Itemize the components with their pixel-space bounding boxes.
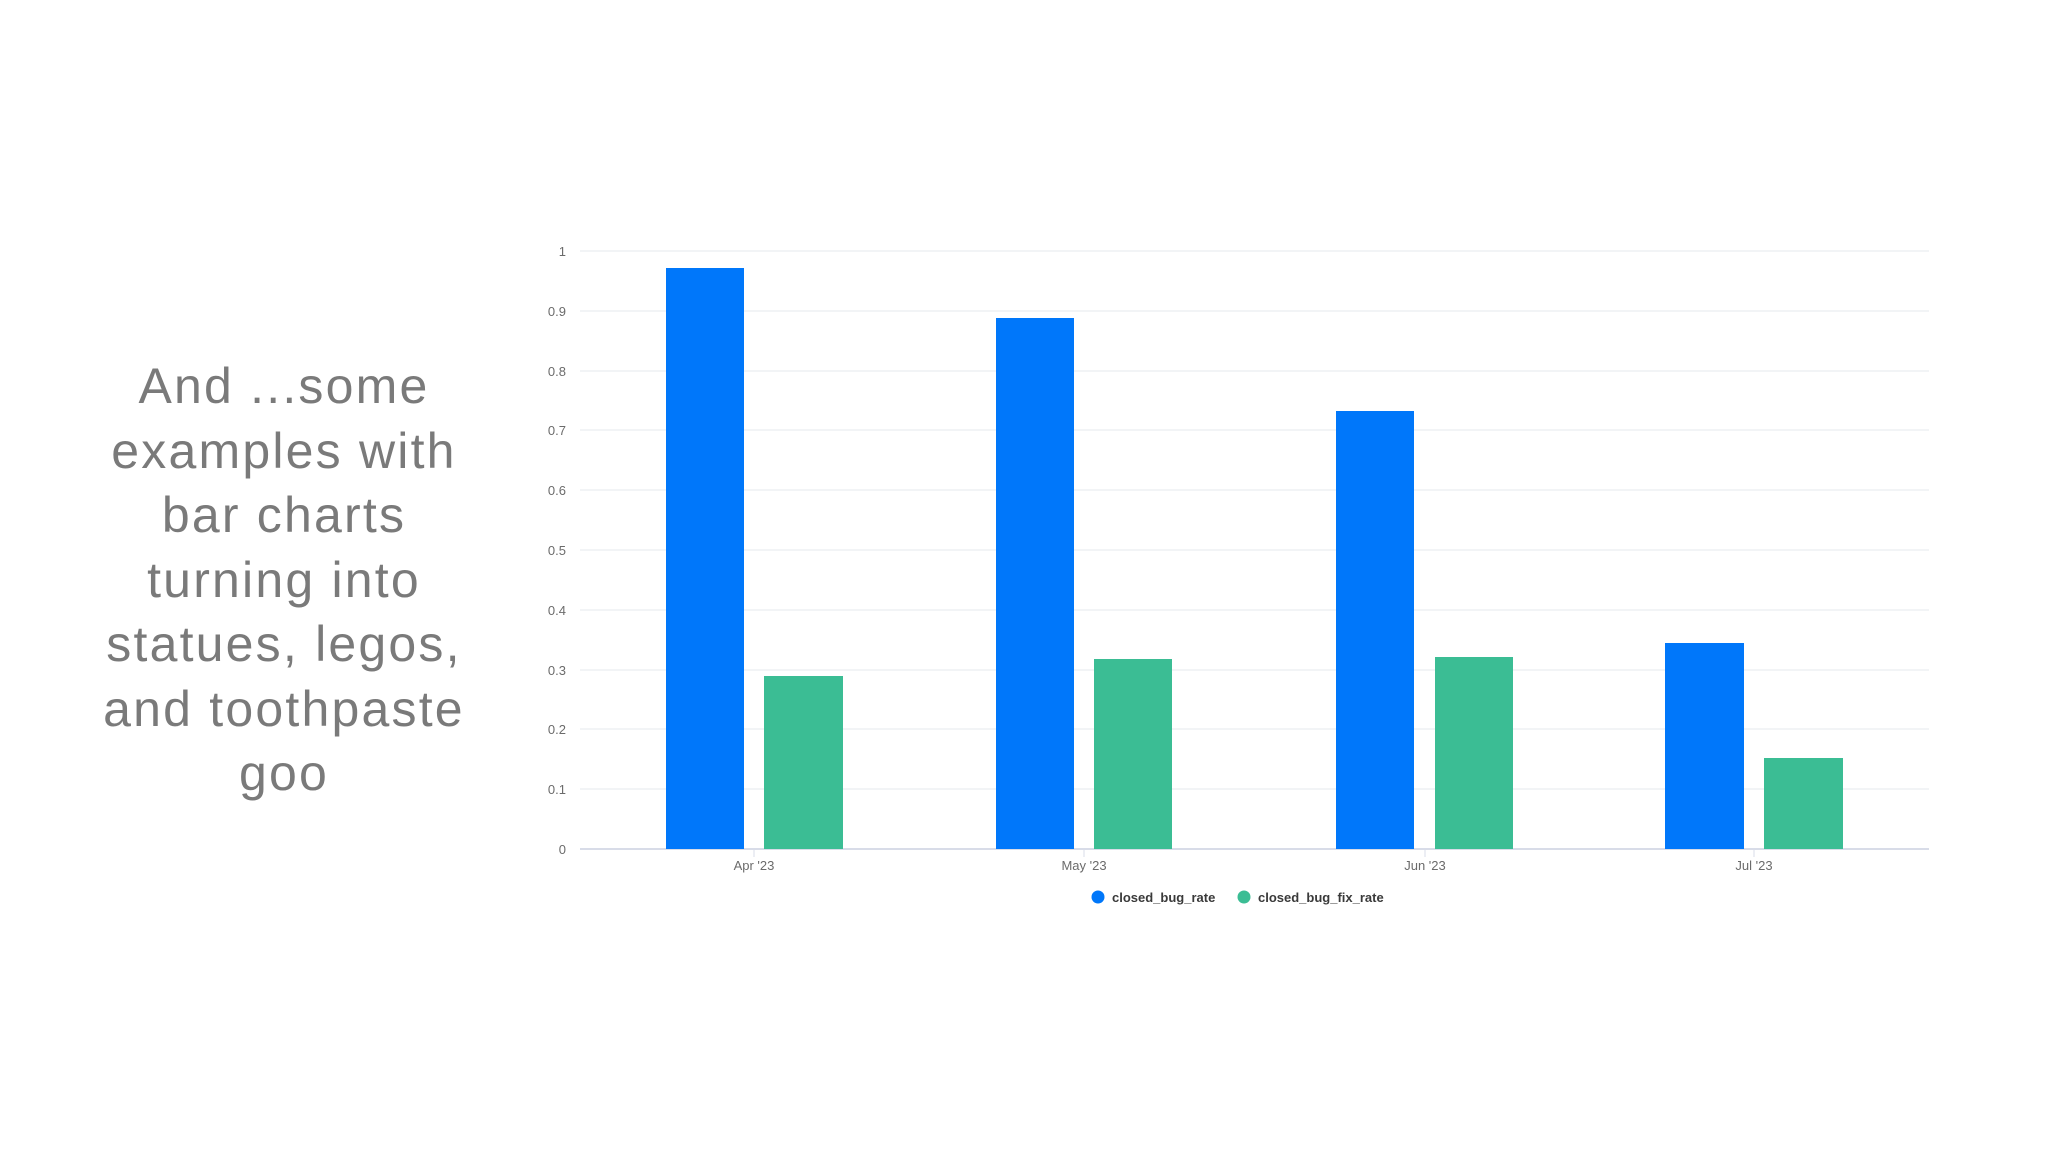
- y axis labels: 0.7: [548, 423, 566, 438]
- text block: left caption: statues, legos,: [106, 616, 462, 672]
- text block: left caption: and toothpaste: [103, 680, 465, 736]
- bars: closed_bug_fix_rate: [764, 657, 1843, 849]
- y axis labels: 0.8: [548, 364, 566, 379]
- y axis labels: 1: [559, 244, 566, 259]
- legend: closed_bug_rate: [1112, 890, 1215, 905]
- x axis labels: May '23: [1061, 858, 1107, 873]
- y axis labels: 0.5: [548, 543, 566, 558]
- y axis labels: 0.3: [548, 663, 566, 678]
- x axis labels: Jun '23: [1404, 858, 1446, 873]
- y axis labels: 0.2: [548, 722, 566, 737]
- y axis labels: 0.4: [548, 603, 566, 618]
- y axis labels: 0.1: [548, 782, 566, 797]
- x axis labels: [734, 849, 1773, 873]
- text block: left caption: goo: [239, 745, 329, 801]
- y axis labels: 0.9: [548, 304, 566, 319]
- text block: left caption: examples with: [111, 422, 457, 478]
- y axis labels: 0.6: [548, 483, 566, 498]
- text block: left caption: bar charts: [162, 487, 406, 543]
- y axis labels: [548, 244, 566, 857]
- text block: left caption: And ...some: [138, 358, 430, 414]
- legend: closed_bug_fix_rate: [1258, 890, 1384, 905]
- legend: [1092, 890, 1384, 905]
- x axis labels: Jul '23: [1735, 858, 1773, 873]
- bars: closed_bug_rate: [666, 268, 1744, 849]
- y axis labels: 0: [559, 842, 566, 857]
- text block: left caption: turning into: [147, 552, 421, 608]
- x axis labels: Apr '23: [734, 858, 774, 873]
- text block: left caption: [103, 358, 465, 801]
